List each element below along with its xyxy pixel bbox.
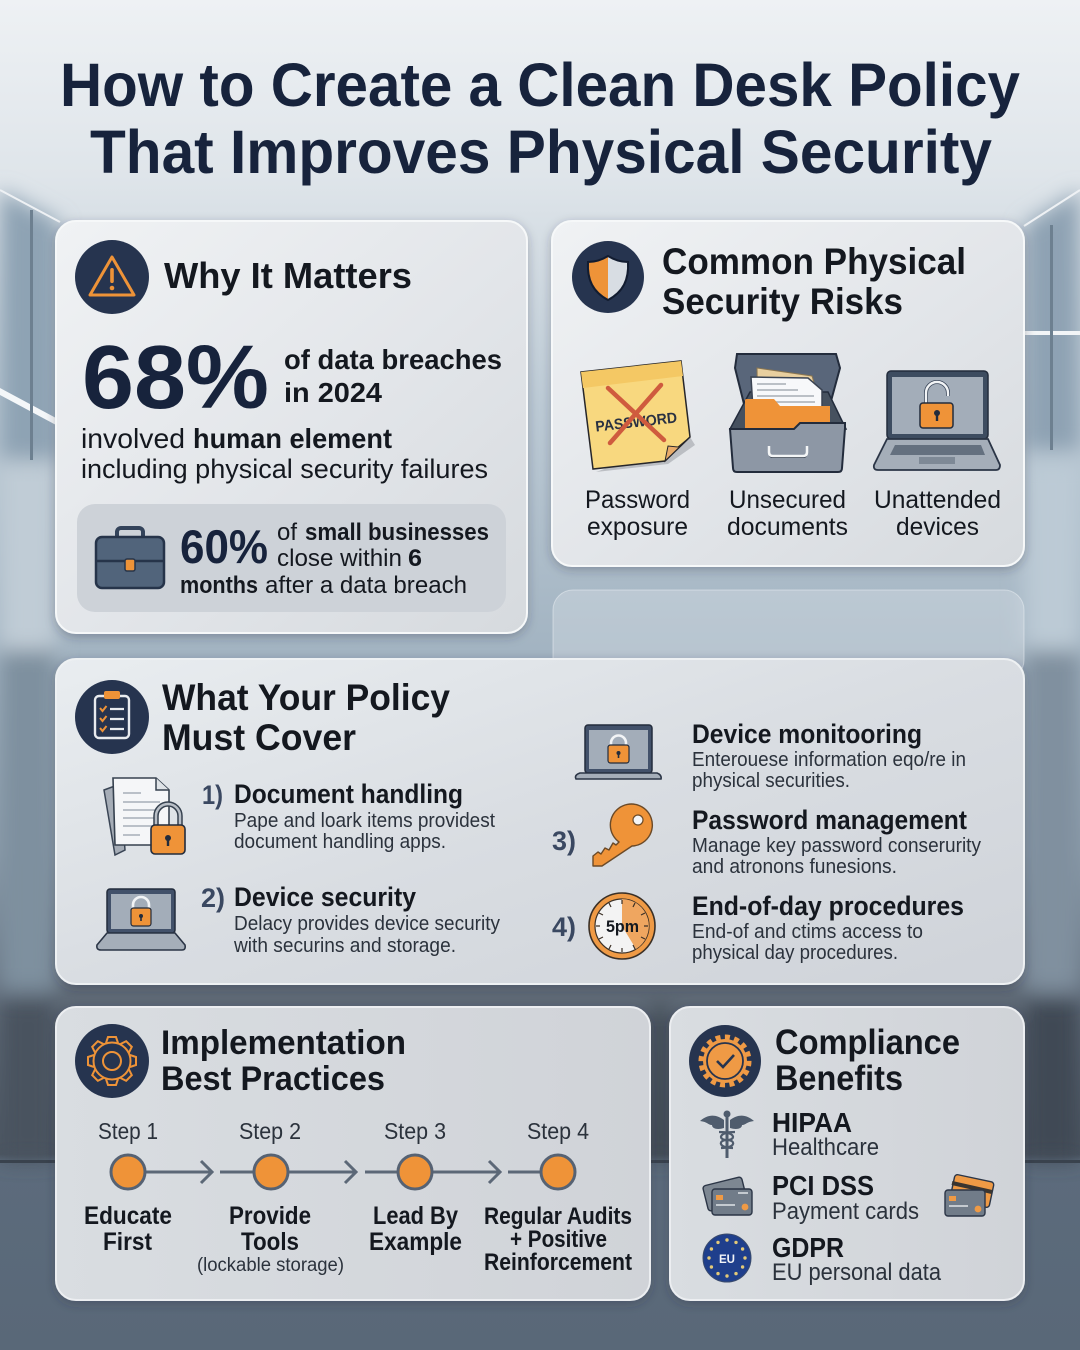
step 4 text: Regular Audits bbox=[484, 1203, 632, 1230]
item: end-of-day procedures: End-of-day procedures bbox=[692, 891, 964, 921]
icon: key bbox=[593, 804, 652, 866]
step 1 text: Educate bbox=[84, 1202, 172, 1230]
heading: common physical security risks: Common Physical bbox=[662, 241, 966, 282]
callout: small businesses bbox=[77, 504, 506, 612]
icon: caduceus bbox=[700, 1110, 754, 1158]
item: document handling: document handling apps. bbox=[234, 831, 446, 853]
step 1 text: First bbox=[103, 1228, 153, 1256]
icon: locked document bbox=[104, 778, 185, 855]
icon: EU flag circle: EU bbox=[719, 1252, 735, 1266]
icon: shield bbox=[572, 241, 644, 313]
label: PCI DSS: PCI DSS bbox=[772, 1170, 874, 1201]
step 3 text: Example bbox=[369, 1228, 462, 1256]
label: GDPR bbox=[772, 1232, 942, 1286]
risk labels: Password bbox=[585, 486, 690, 514]
callout: small businesses: months bbox=[180, 572, 258, 599]
heading: implementation best practices: Best Practices bbox=[161, 1060, 385, 1098]
stat caption: of data breaches bbox=[284, 344, 502, 375]
item: end-of-day procedures bbox=[692, 891, 964, 964]
label: GDPR: GDPR bbox=[772, 1232, 844, 1263]
item: device monitoring bbox=[692, 719, 966, 792]
panel: implementation best practices bbox=[56, 1007, 650, 1300]
icon: EU flag circle bbox=[703, 1234, 751, 1282]
step 1 text bbox=[84, 1202, 172, 1256]
number 3: 3) bbox=[552, 826, 576, 856]
panel: compliance benefits bbox=[670, 1007, 1024, 1300]
risk labels: Unsecured bbox=[729, 486, 846, 514]
icon: payment cards right bbox=[945, 1174, 994, 1216]
panel: common physical security risks bbox=[552, 221, 1024, 566]
step labels: Step 4 bbox=[527, 1118, 589, 1144]
step 4 text: + Positive bbox=[510, 1226, 607, 1253]
callout: small businesses: after a data breach bbox=[265, 572, 467, 599]
item: document handling: Pape and loark items providest bbox=[234, 810, 495, 832]
icon: sticky note with crossed-out password bbox=[581, 361, 695, 472]
number 1: 1) bbox=[202, 780, 223, 810]
callout: small businesses: small businesses bbox=[305, 519, 489, 546]
timeline with arrows bbox=[111, 1155, 575, 1189]
step labels: Step 1 bbox=[98, 1118, 158, 1144]
stat: 68%: 68% bbox=[82, 328, 269, 428]
stat description: human element bbox=[193, 423, 392, 454]
heading: common physical security risks: Security Risks bbox=[662, 281, 903, 322]
heading: implementation best practices: Implementation bbox=[161, 1024, 406, 1062]
label: HIPAA bbox=[772, 1107, 879, 1161]
step 3 text: Lead By bbox=[373, 1202, 458, 1230]
step labels: Step 2 bbox=[239, 1118, 301, 1144]
item: end-of-day procedures: physical day procedures. bbox=[692, 942, 898, 964]
ghost glass panel bbox=[553, 590, 1024, 680]
step 2 text: (lockable storage) bbox=[197, 1255, 344, 1276]
heading: compliance benefits: Benefits bbox=[775, 1059, 903, 1098]
icon: sticky note with crossed-out password: PASSWORD bbox=[595, 409, 678, 436]
heading: common physical security risks bbox=[662, 241, 966, 322]
heading: implementation best practices bbox=[161, 1024, 406, 1098]
stat description: including physical security failures bbox=[81, 454, 488, 484]
item: device security: Delacy provides device security bbox=[234, 913, 500, 935]
heading: what your policy must cover bbox=[162, 677, 450, 758]
heading: why it matters: Why It Matters bbox=[164, 255, 412, 296]
item: password management bbox=[692, 805, 981, 878]
icon: warning triangle bbox=[75, 240, 149, 314]
icon: 5pm clock: 5pm bbox=[606, 917, 639, 936]
title bbox=[60, 51, 1020, 186]
stat description bbox=[81, 423, 488, 484]
icon: checklist clipboard bbox=[75, 680, 149, 754]
callout: small businesses: of bbox=[277, 519, 297, 546]
panel: what your policy must cover bbox=[56, 659, 1024, 984]
label: HIPAA: Healthcare bbox=[772, 1134, 879, 1161]
step 4 text bbox=[484, 1203, 632, 1276]
number 4: 4) bbox=[552, 912, 576, 942]
icon: unlocked laptop bbox=[874, 371, 1000, 470]
title: How to Create a Clean Desk Policy bbox=[60, 51, 1020, 119]
icon: compliance badge bbox=[689, 1025, 761, 1097]
icon: open file drawer bbox=[730, 354, 846, 472]
risk labels: documents bbox=[727, 513, 848, 541]
step 4 text: Reinforcement bbox=[484, 1249, 632, 1276]
item: end-of-day procedures: End-of and ctims access to bbox=[692, 921, 923, 943]
panel: why it matters bbox=[56, 221, 527, 633]
heading: what your policy must cover: Must Cover bbox=[162, 717, 356, 758]
stat caption: in 2024 bbox=[284, 377, 382, 408]
icon: payment cards left bbox=[702, 1177, 752, 1215]
stat description: involved bbox=[81, 423, 185, 454]
heading: compliance benefits: Compliance bbox=[775, 1023, 960, 1062]
risk labels bbox=[585, 486, 1001, 541]
item: device security bbox=[233, 882, 500, 957]
item: device security: Device security bbox=[234, 882, 416, 912]
heading: what your policy must cover: What Your Policy bbox=[162, 677, 450, 718]
icon: briefcase bbox=[96, 528, 164, 588]
item: password management: Password management bbox=[692, 805, 967, 835]
item: password management: Manage key password conserurity bbox=[692, 835, 981, 857]
item: document handling: Document handling bbox=[234, 779, 463, 809]
label: HIPAA: HIPAA bbox=[772, 1107, 852, 1138]
item: device monitoring: Device monitooring bbox=[692, 719, 922, 749]
label: PCI DSS bbox=[772, 1170, 919, 1225]
heading: compliance benefits bbox=[775, 1023, 960, 1098]
risk labels: exposure bbox=[587, 513, 688, 541]
icon: 5pm clock bbox=[589, 893, 655, 959]
step labels bbox=[98, 1118, 589, 1144]
stat: 60%: 60% bbox=[180, 520, 268, 573]
icon: gear bbox=[75, 1024, 149, 1098]
risk labels: Unattended bbox=[874, 486, 1001, 514]
item: password management: and atronons funesions. bbox=[692, 856, 897, 878]
icon: monitoring laptop bbox=[576, 725, 661, 779]
step 2 text: Provide bbox=[229, 1202, 311, 1230]
item: device monitoring: physical securities. bbox=[692, 770, 850, 792]
item: device monitoring: Enterouese information eqo/re in bbox=[692, 749, 966, 771]
number 2: 2) bbox=[201, 883, 225, 913]
step 2 text: Tools bbox=[241, 1228, 299, 1256]
title: That Improves Physical Security bbox=[90, 118, 992, 186]
icon: locked laptop bbox=[97, 889, 185, 950]
step 3 text bbox=[369, 1202, 462, 1256]
callout: small businesses: 6 bbox=[408, 545, 422, 572]
risk labels: devices bbox=[896, 513, 979, 541]
label: GDPR: EU personal data bbox=[772, 1259, 942, 1286]
stat caption bbox=[284, 344, 502, 408]
step 2 text bbox=[197, 1202, 344, 1276]
step labels: Step 3 bbox=[384, 1118, 446, 1144]
item: device security: with securins and storage. bbox=[233, 935, 456, 957]
callout: small businesses: close within bbox=[277, 545, 402, 572]
item: document handling bbox=[234, 779, 495, 853]
label: PCI DSS: Payment cards bbox=[772, 1198, 919, 1225]
